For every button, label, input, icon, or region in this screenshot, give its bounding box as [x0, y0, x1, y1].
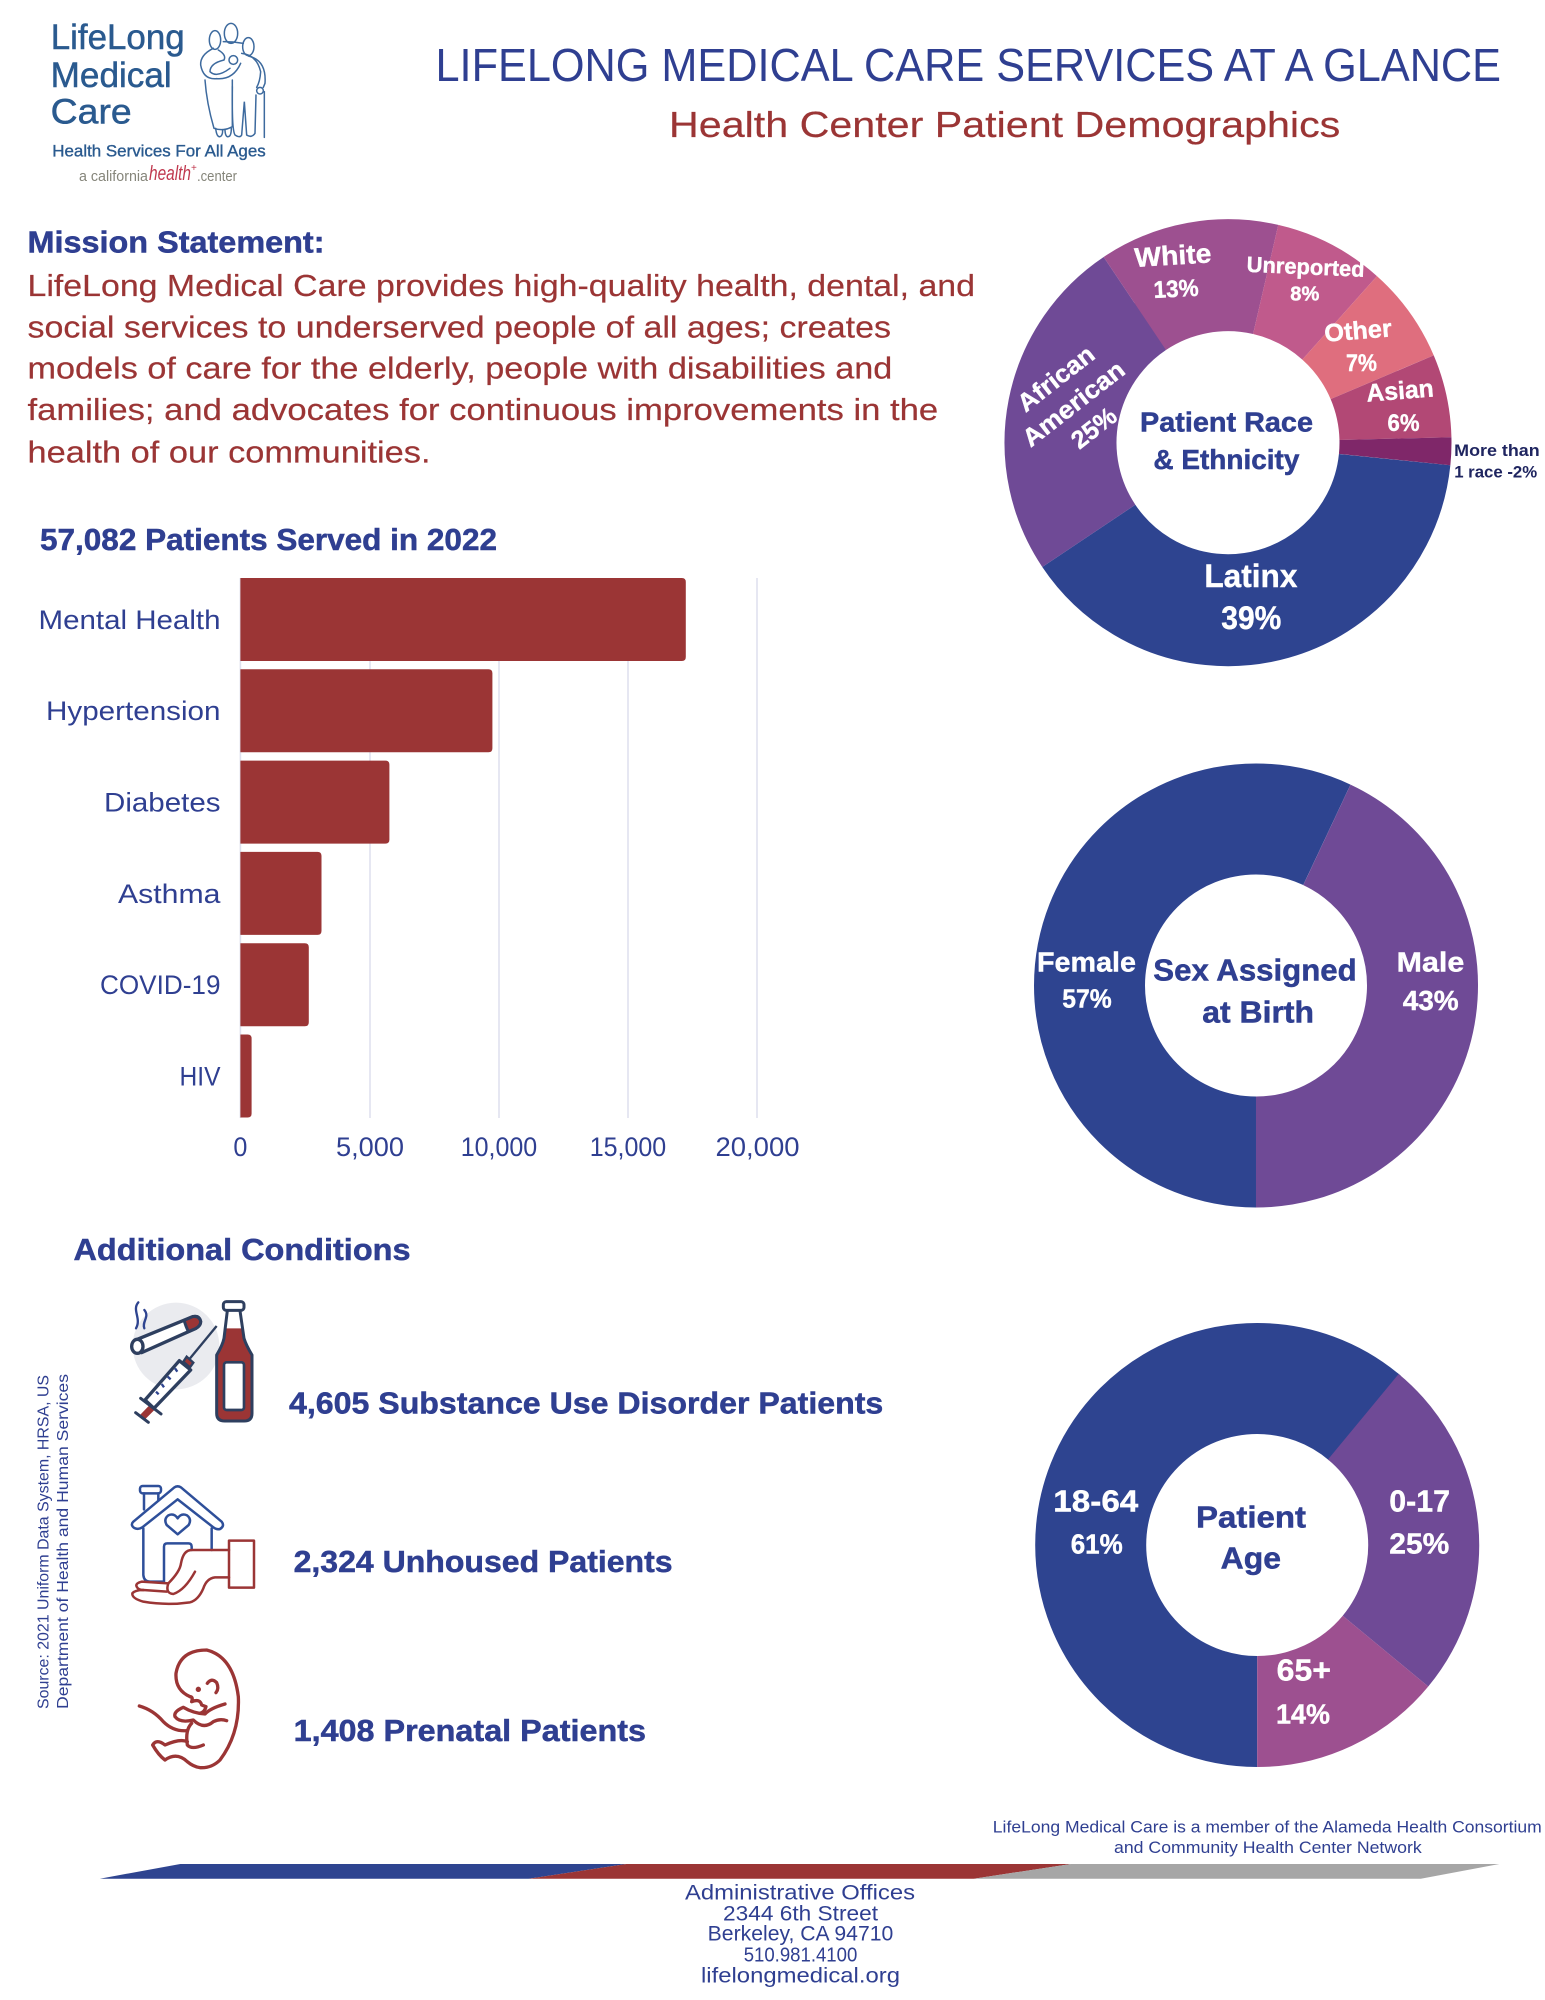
age labels: 14%: [1276, 1698, 1330, 1729]
sex labels: Male: [1397, 947, 1464, 978]
source note: [35, 1374, 72, 1709]
administrative offices address: Administrative Offices: [685, 1882, 915, 1904]
donut chart: patient race and ethnicity: [991, 206, 1540, 679]
race labels: 6%: [1388, 410, 1420, 437]
axis labels: 20,000: [716, 1132, 800, 1162]
membership note: [993, 1818, 1542, 1857]
icon: fetus: [139, 1650, 238, 1768]
membership note: LifeLong Medical Care is a member of the Alameda Health Consortium: [993, 1818, 1542, 1836]
logo: LifeLong Medical Care: [51, 18, 266, 185]
unhoused label: 2,324 Unhoused Patients: [294, 1545, 673, 1579]
race labels: 7%: [1346, 350, 1377, 377]
category labels: COVID-19: [100, 970, 220, 1000]
age labels: 18-64: [1053, 1484, 1139, 1519]
axis labels: 10,000: [461, 1132, 537, 1162]
mission statement text: [28, 270, 975, 470]
logo tagline: a california: [79, 169, 149, 185]
axis labels: 15,000: [590, 1132, 666, 1162]
sex labels: 43%: [1403, 985, 1459, 1016]
sex chart center title: at Birth: [1202, 995, 1314, 1030]
mission statement text: social services to underserved people of all ages; creates: [28, 312, 891, 345]
source note: Source: 2021 Uniform Data System, HRSA, US: [35, 1375, 52, 1709]
logo family figure: [201, 23, 265, 137]
race labels: 13%: [1153, 275, 1199, 304]
more than one race label: [1454, 441, 1540, 482]
age labels: 61%: [1071, 1528, 1123, 1559]
age labels: 65+: [1277, 1653, 1331, 1688]
mission statement heading: Mission Statement:: [28, 226, 324, 260]
category labels: Hypertension: [46, 696, 220, 726]
administrative offices address: Berkeley, CA 94710: [708, 1923, 893, 1946]
race labels: American: [1017, 356, 1130, 453]
race chart center title: [1140, 407, 1313, 475]
source note: Department of Health and Human Services: [55, 1374, 72, 1709]
sex labels: [1037, 947, 1464, 1016]
icon: house in hand: [132, 1486, 254, 1604]
logo wordmark: Health Services For All Ages: [52, 143, 266, 161]
bars: [240, 578, 686, 1118]
age chart center title: Patient: [1196, 1499, 1306, 1534]
mission statement text: models of care for the elderly, people with disabilities and: [28, 353, 892, 386]
logo tagline: [79, 163, 237, 185]
sex chart center title: [1153, 953, 1357, 1030]
administrative offices address: lifelongmedical.org: [701, 1964, 900, 1987]
race labels: Asian: [1365, 374, 1435, 408]
donut chart: patient age: [1023, 1311, 1492, 1779]
category labels: HIV: [180, 1062, 220, 1092]
mission statement text: families; and advocates for continuous improvements in the: [28, 394, 938, 427]
logo wordmark: Medical: [51, 56, 172, 95]
logo tagline: .center: [197, 169, 237, 185]
logo wordmark: LifeLong: [51, 18, 185, 57]
logo wordmark: Care: [51, 93, 132, 132]
donut chart: sex assigned at birth: [1034, 764, 1478, 1207]
age chart center title: Age: [1221, 1540, 1281, 1575]
race labels: 8%: [1290, 284, 1320, 306]
administrative offices address: [685, 1882, 915, 1987]
mission statement text: LifeLong Medical Care provides high-quality health, dental, and: [28, 270, 975, 303]
prenatal label: 1,408 Prenatal Patients: [294, 1714, 646, 1748]
race chart center title: Patient Race: [1140, 407, 1313, 438]
substance use label: 4,605 Substance Use Disorder Patients: [289, 1386, 883, 1420]
age chart center title: [1196, 1499, 1306, 1575]
logo wordmark: [51, 18, 266, 161]
sex chart center title: Sex Assigned: [1153, 953, 1357, 988]
race labels: White: [1134, 238, 1212, 273]
race labels: 25%: [1066, 402, 1122, 455]
subtitle: Health Center Patient Demographics: [669, 104, 1340, 145]
race labels: African: [1012, 340, 1100, 418]
race labels: Latinx: [1204, 558, 1298, 594]
axis labels: 5,000: [336, 1132, 404, 1162]
sex labels: Female: [1037, 947, 1136, 978]
administrative offices address: 2344 6th Street: [723, 1902, 878, 1925]
axis labels: [233, 1132, 799, 1162]
footer tricolor stripe: [100, 1864, 1499, 1879]
administrative offices address: 510.981.4100: [744, 1945, 857, 1967]
axis labels: 0: [233, 1132, 247, 1162]
logo tagline: +: [191, 163, 197, 174]
age labels: 25%: [1389, 1528, 1450, 1560]
mission statement text: health of our communities.: [28, 437, 431, 470]
age labels: [1053, 1484, 1450, 1729]
race labels: Unreported: [1246, 252, 1365, 282]
more than one race label: More than: [1454, 441, 1540, 460]
membership note: and Community Health Center Network: [1114, 1839, 1422, 1857]
category labels: [38, 605, 222, 1092]
category labels: Asthma: [118, 879, 222, 909]
icon: substance use: [132, 1302, 252, 1422]
additional conditions heading: Additional Conditions: [74, 1233, 410, 1267]
logo tagline: health: [149, 163, 191, 185]
race labels: Other: [1323, 314, 1393, 348]
bar chart heading: 57,082 Patients Served in 2022: [40, 523, 497, 557]
category labels: Diabetes: [104, 788, 220, 818]
bar chart: patients by condition: [38, 578, 800, 1162]
sex labels: 57%: [1062, 984, 1112, 1014]
age labels: 0-17: [1389, 1484, 1450, 1519]
more than one race label: 1 race -2%: [1454, 463, 1537, 482]
race labels: 39%: [1221, 600, 1281, 636]
category labels: Mental Health: [38, 605, 220, 635]
race chart center title: & Ethnicity: [1153, 444, 1300, 475]
race labels: [1012, 238, 1435, 636]
